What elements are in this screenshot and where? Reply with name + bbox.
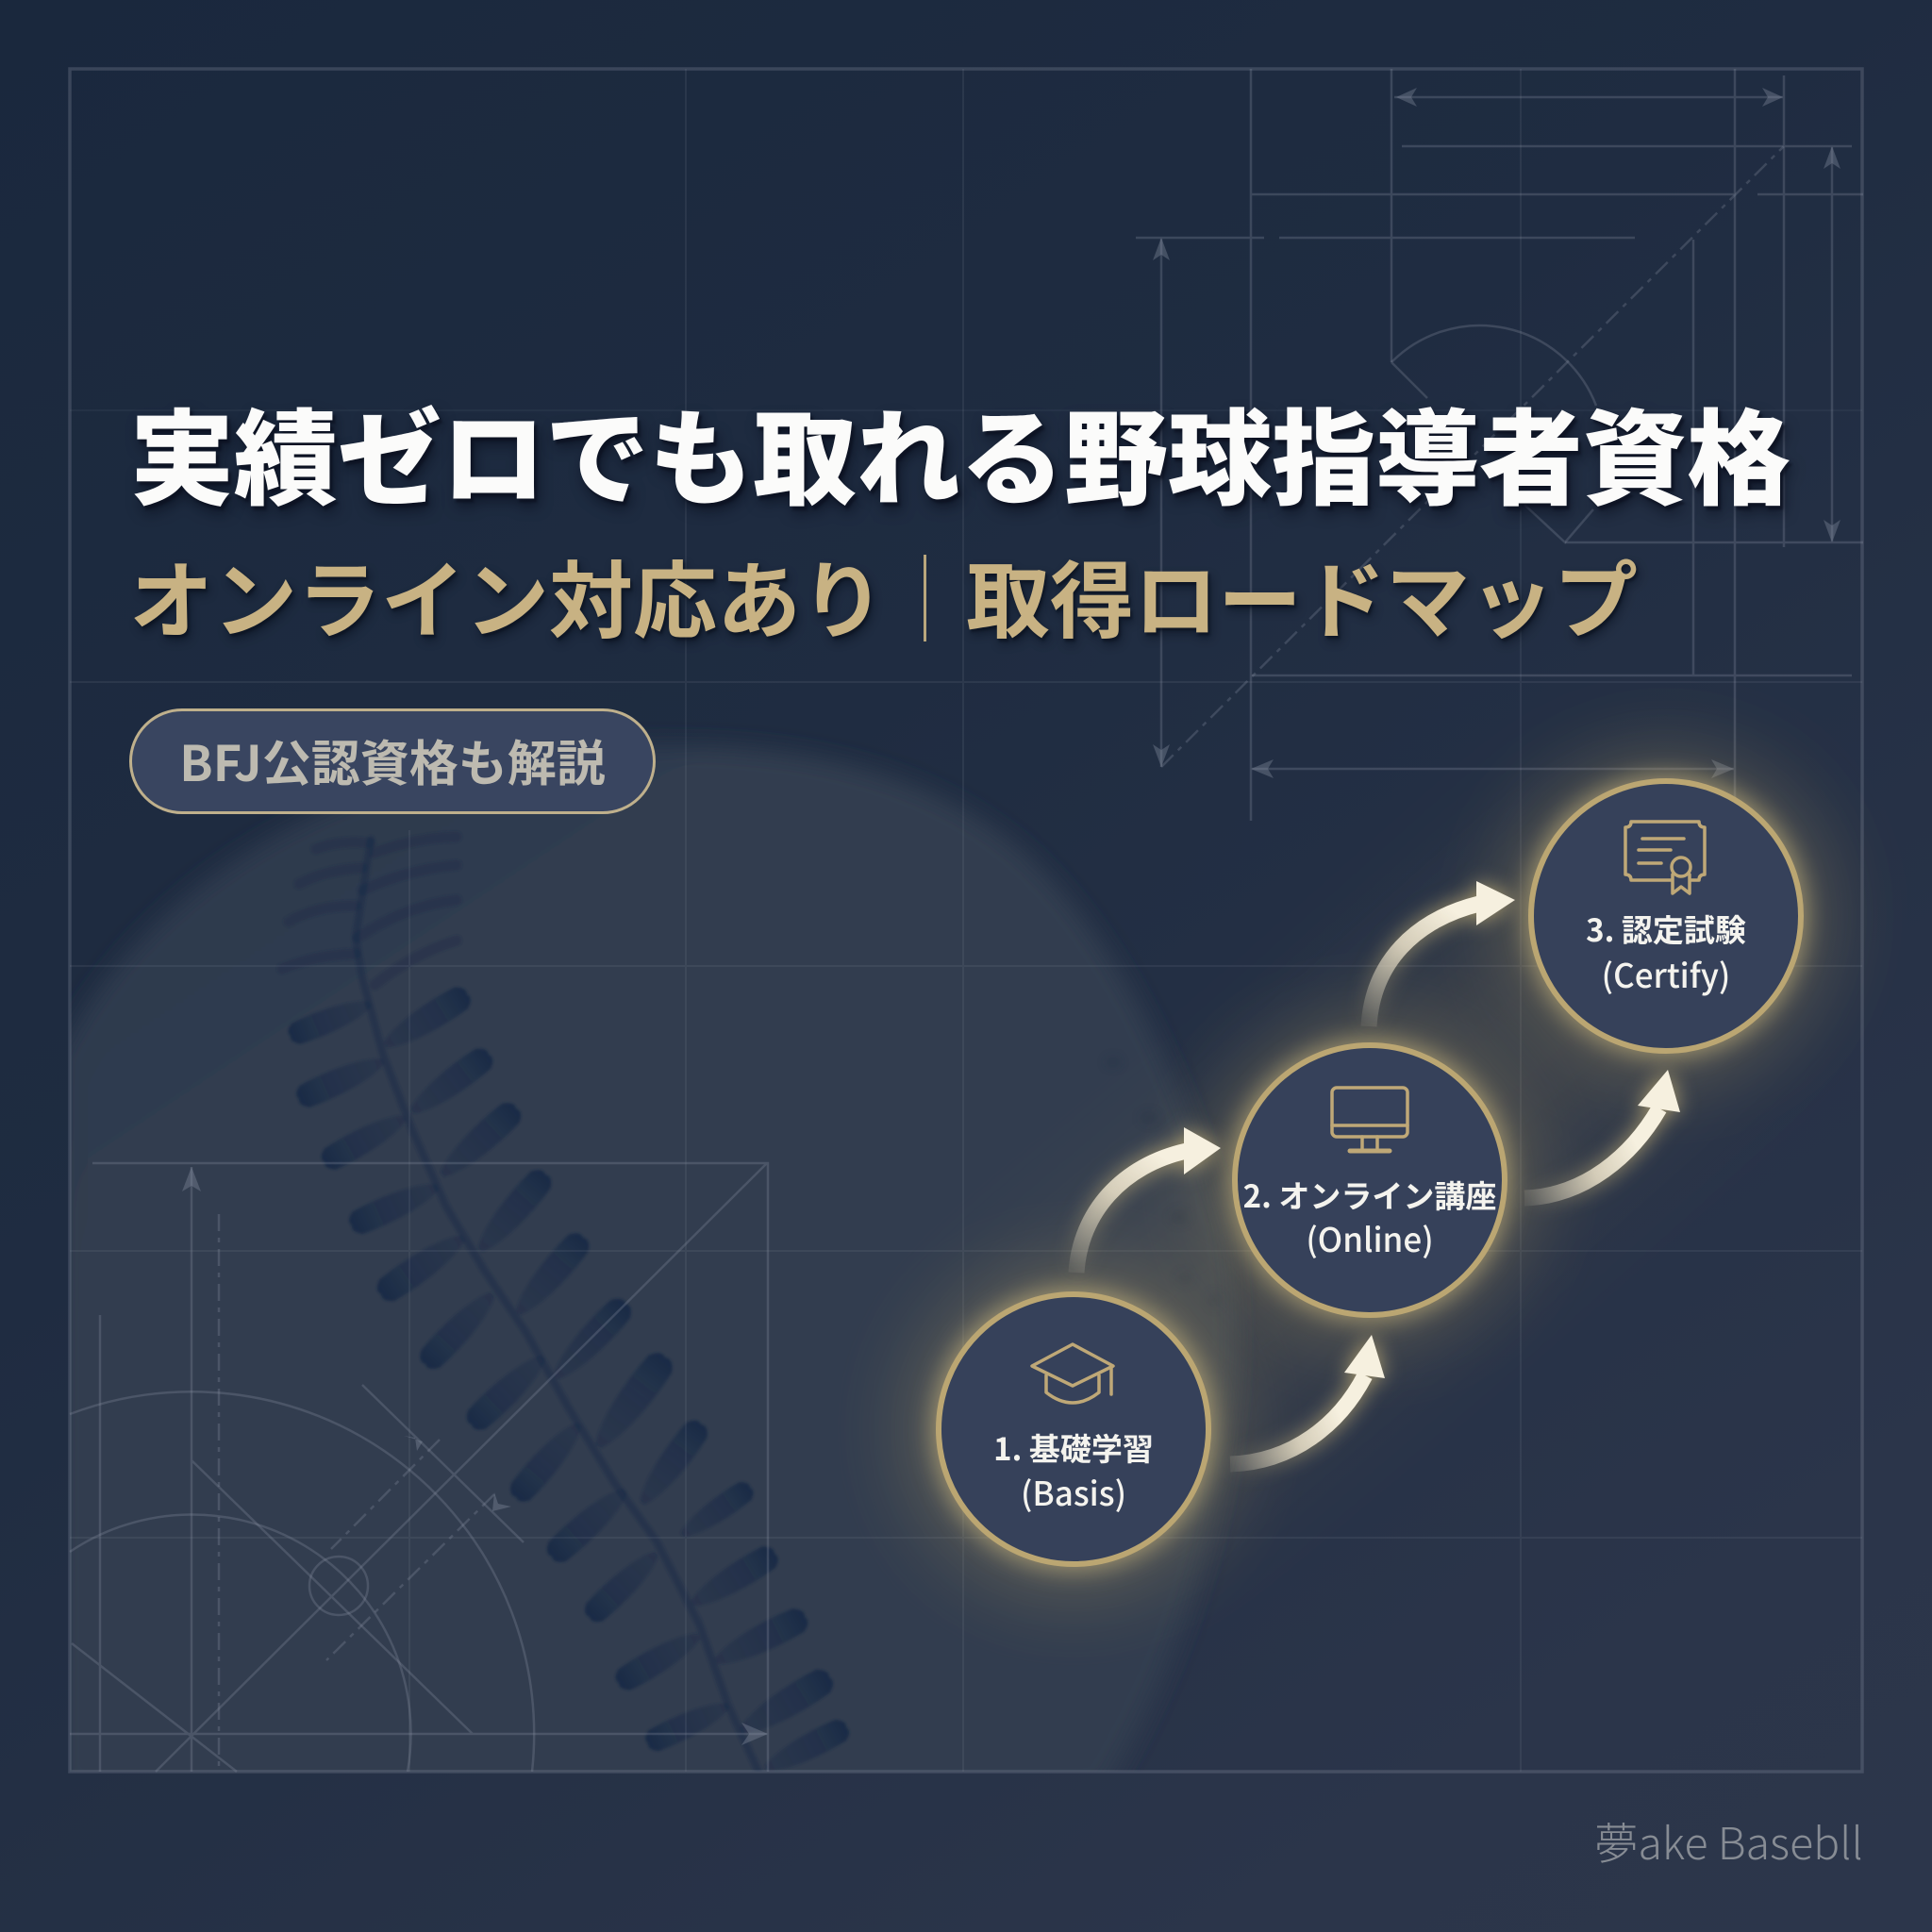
subtitle divider xyxy=(924,555,926,641)
step 2: online: (Online) xyxy=(1306,1214,1434,1262)
icon: monitor xyxy=(1332,1088,1407,1151)
baseball background xyxy=(57,745,1236,1792)
golden glow behind roadmap xyxy=(913,756,1826,1590)
arrow: online to certify, upper xyxy=(1369,881,1515,1026)
seam smudges xyxy=(1106,1058,1222,1307)
subtitle right: 取得ロードマップ xyxy=(966,534,1638,656)
blueprint: bottom-left field diagram xyxy=(70,1163,768,1772)
step 3: certify: (Certify) xyxy=(1602,950,1730,998)
step 1: basis: 1. 基礎学習 xyxy=(993,1424,1154,1470)
step 2: online: 2. オンライン講座 xyxy=(1243,1172,1496,1217)
icon: certificate xyxy=(1625,822,1705,893)
step 3: certify: 3. 認定試験 xyxy=(1586,906,1746,951)
subtitle left: オンライン対応あり xyxy=(129,534,885,656)
step 1: basis xyxy=(939,1294,1208,1564)
arrow: online to certify, lower xyxy=(1524,1070,1680,1198)
step 1: basis: (Basis) xyxy=(1021,1468,1126,1516)
arrow: basis to online, lower xyxy=(1230,1335,1385,1464)
baseball stitches xyxy=(282,837,853,1780)
arrow: basis to online, upper xyxy=(1076,1127,1221,1273)
badge pill xyxy=(129,708,656,814)
blueprint: top-right field diagram xyxy=(1136,69,1863,821)
step 2: online xyxy=(1235,1045,1505,1315)
step 3: certify xyxy=(1531,781,1801,1051)
icon: graduation cap xyxy=(1032,1344,1113,1403)
brand watermark: 夢ake Basebll xyxy=(1594,1809,1863,1873)
title: 実績ゼロでも取れる野球指導者資格 xyxy=(130,375,1790,526)
badge text: BFJ公認資格も解説 xyxy=(179,724,606,795)
